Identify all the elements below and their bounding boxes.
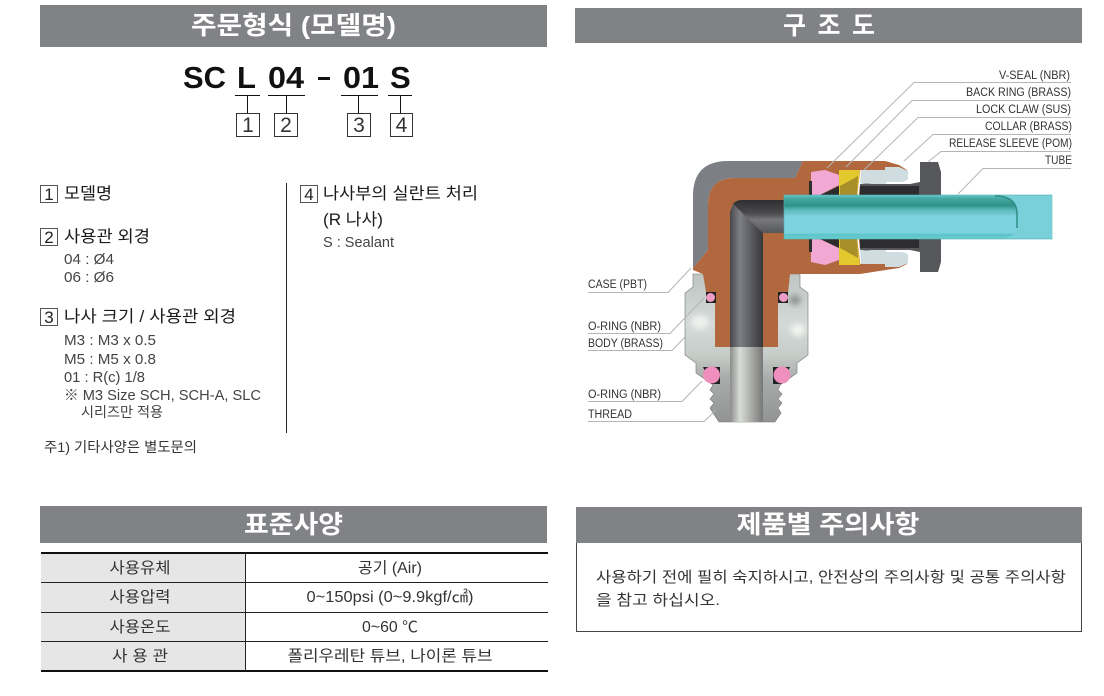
back rings and claws xyxy=(839,170,860,265)
small o-rings xyxy=(706,292,788,303)
callouts: right labels: V-SEAL (NBR) xyxy=(999,70,1070,82)
model code diagram: 3 xyxy=(353,114,365,137)
heading: structure diagram xyxy=(575,8,1082,43)
legend item 2: tube outer diameter: 06 : Ø6 xyxy=(64,270,114,286)
row: tube: 사 용 관 xyxy=(112,647,168,665)
callouts: left labels: O-RING (NBR) xyxy=(588,321,661,333)
legend item 4: sealant: S : Sealant xyxy=(323,235,394,251)
collar xyxy=(860,167,908,267)
caution text xyxy=(596,569,1066,609)
large o-rings xyxy=(703,366,790,384)
callouts: right labels: LOCK CLAW (SUS) xyxy=(976,104,1071,116)
model code diagram: 01 xyxy=(343,60,379,95)
callouts: right labels: RELEASE SLEEVE (POM) xyxy=(949,138,1072,150)
legend item 3: thread size: 시리즈만 적용 xyxy=(81,404,163,420)
case (gray shell) xyxy=(693,161,803,268)
heading: product cautions: 제품별 주의사항 xyxy=(736,511,920,539)
callouts: right labels: COLLAR (BRASS) xyxy=(985,121,1072,133)
row: tube xyxy=(112,647,492,665)
legend item 4: sealant: 4 xyxy=(304,185,314,204)
callouts: right labels xyxy=(827,70,1072,194)
row: pressure: 0~150psi (0~9.9kgf/㎠) xyxy=(306,588,474,606)
model code diagram: S xyxy=(390,60,411,95)
legend item 2: tube outer diameter: 사용관 외경 xyxy=(64,227,150,246)
row: tube: 폴리우레탄 튜브, 나이론 튜브 xyxy=(288,647,492,665)
callouts: left labels: O-RING (NBR) xyxy=(588,389,661,401)
structure cross-section drawing xyxy=(685,161,1052,422)
row: fluid: 사용유체 xyxy=(110,559,170,577)
legend item 1: model name xyxy=(40,184,112,204)
caution text: 을 참고 하십시오. xyxy=(596,592,720,609)
legend item 4: sealant: 나사부의 실란트 처리 xyxy=(323,184,478,203)
legend item 2: tube outer diameter: 04 : Ø4 xyxy=(64,252,114,268)
callouts: right labels: BACK RING (BRASS) xyxy=(966,87,1071,99)
tube xyxy=(784,195,1052,239)
row: temperature: 0~60 ℃ xyxy=(362,619,418,636)
legend item 4: sealant xyxy=(300,184,478,251)
legend item 3: thread size xyxy=(40,307,261,420)
model code diagram xyxy=(183,60,412,137)
callouts: left labels: THREAD xyxy=(588,409,632,421)
heading: order format xyxy=(40,5,547,47)
bore xyxy=(730,204,763,347)
legend item 2: tube outer diameter xyxy=(40,227,150,286)
row: fluid: 공기 (Air) xyxy=(358,559,422,577)
brown resin core xyxy=(693,161,907,347)
brown below tube xyxy=(763,233,790,347)
model code diagram: L xyxy=(237,60,256,95)
model code diagram: 4 xyxy=(396,114,408,137)
callouts: left labels xyxy=(588,268,716,422)
model code diagram: 2 xyxy=(280,114,292,137)
heading: order format: 주문형식 (모델명) xyxy=(191,12,396,40)
body silver xyxy=(685,274,808,422)
legend item 3: thread size: 나사 크기 / 사용관 외경 xyxy=(64,307,236,326)
legend item 1: model name: 1 xyxy=(44,185,54,204)
release sleeve xyxy=(860,162,941,272)
legend item 1: model name: 모델명 xyxy=(64,184,112,203)
heading: standard specification xyxy=(40,506,547,543)
model code diagram: 1 xyxy=(242,114,254,137)
callouts: left labels: BODY (BRASS) xyxy=(588,338,663,350)
legend item 3: thread size: M3 : M3 x 0.5 xyxy=(64,333,156,349)
caution text: 사용하기 전에 필히 숙지하시고, 안전상의 주의사항 및 공통 주의사항 xyxy=(596,569,1066,586)
legend item 2: tube outer diameter: 2 xyxy=(44,228,54,247)
footnote: 주1) 기타사양은 별도문의 xyxy=(44,439,197,455)
row: fluid xyxy=(110,559,422,577)
model code diagram: SC xyxy=(183,60,226,95)
callouts: left labels: CASE (PBT) xyxy=(588,279,647,291)
legend item 3: thread size: 01 : R(c) 1/8 xyxy=(64,370,145,386)
heading: product cautions xyxy=(576,507,1082,632)
heading: structure diagram: 구 조 도 xyxy=(783,12,875,40)
legend item 3: thread size: ※ M3 Size SCH, SCH-A, SLC xyxy=(64,388,261,404)
legend item 4: sealant: (R 나사) xyxy=(323,210,383,229)
row: temperature xyxy=(110,618,418,636)
row: pressure: 사용압력 xyxy=(110,588,170,606)
callouts: right labels: TUBE xyxy=(1045,155,1072,167)
legend item 3: thread size: M5 : M5 x 0.8 xyxy=(64,352,156,368)
heading: standard specification: 표준사양 xyxy=(244,511,343,539)
legend item 3: thread size: 3 xyxy=(44,308,54,327)
specification table xyxy=(41,552,548,672)
v-seals xyxy=(811,170,839,265)
row: temperature: 사용온도 xyxy=(110,618,170,636)
row: pressure xyxy=(110,588,474,606)
model code diagram: 04 xyxy=(268,60,305,95)
